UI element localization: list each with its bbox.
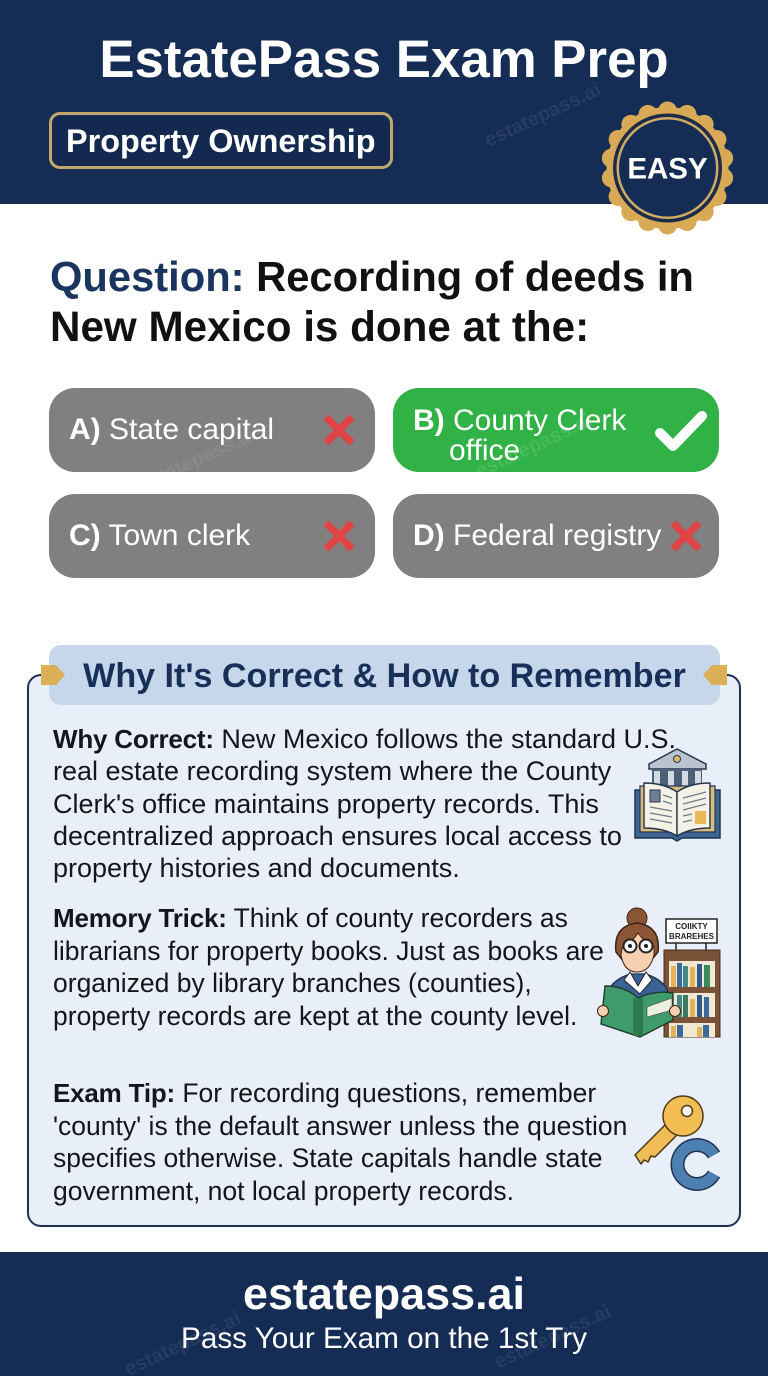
icon: librarian with bookshelf — [597, 908, 720, 1038]
icon: right gold tag — [703, 665, 727, 685]
option B — [393, 388, 719, 472]
option A — [49, 388, 375, 472]
icon: librarian with bookshelf: BRAREHES — [669, 932, 715, 941]
footer band — [0, 1252, 768, 1376]
icon: red cross — [323, 414, 354, 446]
option B: B) County Clerk — [413, 404, 626, 437]
text block: exam tip: specifies otherwise. State capitals handle state — [53, 1143, 602, 1173]
text block: memory trick: property records are kept at the county level. — [53, 1001, 577, 1031]
text block: memory trick: organized by library branches (counties), — [53, 968, 532, 998]
footer tagline: Pass Your Exam on the 1st Try — [181, 1322, 587, 1355]
text block: memory trick: Memory Trick: Think of county recorders as — [53, 903, 568, 933]
question — [50, 253, 694, 350]
option C — [49, 494, 375, 578]
text block: why correct — [53, 724, 676, 883]
option B: estatepass.ai — [472, 409, 595, 483]
text block: why correct: Why Correct: New Mexico follows the standard U.S. — [53, 724, 676, 754]
option D — [393, 494, 719, 578]
text block: exam tip: Exam Tip: For recording questions, remember — [53, 1078, 596, 1108]
difficulty badge — [602, 102, 734, 234]
option C: C) Town clerk — [69, 519, 250, 552]
icon: white check — [655, 411, 707, 451]
text block: memory trick — [53, 903, 604, 1031]
icon: red cross — [323, 520, 354, 552]
panel heading: Why It's Correct & How to Remember — [83, 657, 686, 695]
footer site name: estatepass.ai — [243, 1268, 525, 1319]
text block: why correct: Clerk's office maintains property records. This — [53, 789, 599, 819]
category tag — [49, 112, 393, 169]
text block: why correct: decentralized approach ensures local access to — [53, 821, 622, 851]
icon: left gold tag — [41, 665, 65, 685]
text block: exam tip: government, not local property records. — [53, 1176, 514, 1206]
category tag: Property Ownership — [66, 123, 376, 159]
panel: explanation — [27, 674, 741, 1227]
title: EstatePass Exam Prep — [99, 30, 669, 89]
header band: estatepass.ai — [481, 78, 604, 152]
option D: D) Federal registry — [413, 519, 661, 552]
question: New Mexico is done at the: — [50, 303, 589, 350]
icon: red cross — [670, 520, 702, 552]
text block: why correct: property histories and documents. — [53, 853, 460, 883]
option B: office — [449, 434, 520, 467]
icon: courthouse and open book — [634, 748, 721, 842]
icon: key and letter C — [634, 1095, 720, 1191]
text block: exam tip — [53, 1078, 627, 1206]
header band — [0, 0, 768, 204]
text block: exam tip: 'county' is the default answer unless the question — [53, 1111, 627, 1141]
option A: A) State capital — [69, 413, 274, 446]
option A: estatepass.ai — [135, 423, 258, 497]
text block: why correct: real estate recording system where the County — [53, 756, 611, 786]
icon: librarian with bookshelf: COIIKTY — [675, 922, 708, 931]
footer band: estatepass.ai — [491, 1300, 614, 1374]
text block: memory trick: librarians for property books. Just as books are — [53, 936, 604, 966]
difficulty badge: EASY — [627, 152, 708, 186]
panel heading — [49, 645, 720, 705]
question: Question: Recording of deeds in — [50, 253, 694, 300]
